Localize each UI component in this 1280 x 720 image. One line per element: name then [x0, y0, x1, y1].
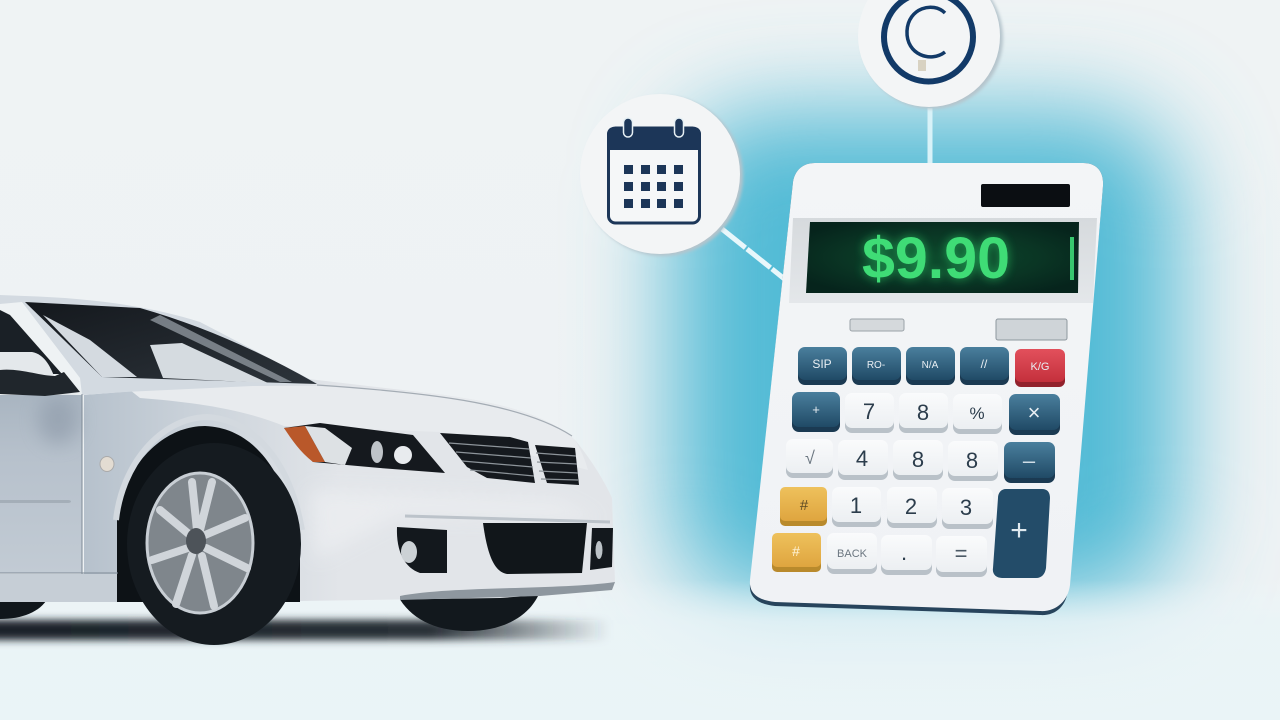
right slider: [996, 319, 1067, 340]
centre air intake: [483, 523, 587, 574]
bumper highlight: [310, 490, 600, 560]
key row 3: 8: [912, 447, 924, 472]
left fog recess: [397, 527, 447, 573]
spokes: [152, 482, 247, 606]
key row 1: K/G: [1031, 361, 1049, 373]
left slider: [850, 319, 904, 331]
right grille: [535, 445, 579, 485]
display cursor: [1070, 237, 1074, 280]
car body: [84, 378, 615, 601]
door shadow under mirror: [38, 396, 78, 444]
solar panel: [981, 184, 1070, 207]
windscreen reflection right: [150, 343, 268, 383]
sill: [0, 574, 118, 602]
bumper lip: [400, 582, 615, 600]
roof and A-pillar: [0, 295, 317, 395]
car: [0, 295, 615, 645]
key row 4: 1: [850, 493, 862, 518]
key row 4: 3: [960, 495, 972, 520]
key row 1: SIP: [812, 357, 832, 371]
connector: calendar to calculator: [722, 229, 787, 281]
display bezel: [789, 218, 1097, 303]
connector: copyright to calculator: [928, 108, 932, 164]
badge disc: [861, 0, 1003, 109]
blue glow behind calculator: [672, 112, 1177, 602]
left fog lamp: [401, 541, 417, 563]
key row 3: 4: [856, 446, 868, 471]
rim: [147, 473, 253, 613]
windscreen reflection top: [150, 315, 292, 382]
bumper upper crease: [405, 516, 610, 522]
plus key: +: [1010, 514, 1028, 547]
door panel: [0, 395, 82, 573]
key row 2: ×: [1028, 400, 1040, 425]
plus key: [993, 489, 1050, 578]
calendar badge: [580, 94, 743, 256]
wing mirror: [0, 352, 54, 376]
car ground shadow: [0, 620, 610, 640]
arch trim: [116, 417, 302, 530]
key row 5: .: [901, 540, 907, 565]
display value: $9.90: [862, 226, 1010, 291]
far front tyre: [398, 596, 538, 631]
hood crease: [317, 385, 572, 436]
key row 3: –: [1023, 448, 1036, 473]
key row 3: [786, 439, 1055, 483]
icon smudge: [918, 60, 926, 71]
calculator: [750, 163, 1103, 615]
key row 2: 8: [917, 400, 929, 425]
side window: [0, 310, 62, 374]
display screen: [806, 222, 1079, 293]
key row 5: =: [955, 541, 967, 566]
icon: copyright ring: [884, 0, 973, 82]
display glow: $9.90: [862, 226, 1010, 291]
tyre: [127, 443, 301, 645]
windscreen: [25, 302, 317, 384]
windscreen reflection left: [43, 315, 137, 377]
left grille: [440, 433, 535, 483]
wheel arch: [117, 426, 300, 602]
key row 4: #: [800, 497, 809, 514]
calculator case: [750, 163, 1103, 611]
front wheel: [127, 443, 301, 645]
copyright badge: [858, 0, 1003, 109]
key row 2: [792, 392, 1060, 435]
badge disc: [583, 96, 743, 256]
key row 1: [798, 347, 1065, 387]
floor highlight: [0, 580, 1280, 720]
key row 4: 2: [905, 494, 917, 519]
hub: [186, 528, 206, 554]
key row 3: 8: [966, 448, 978, 473]
key row 2: %: [969, 404, 985, 423]
key row 1: //: [981, 357, 988, 371]
key row 2: 7: [863, 399, 875, 424]
key row 1: N/A: [922, 360, 939, 371]
icon: copyright letter: [907, 7, 945, 57]
key row 4: [780, 487, 993, 529]
fender badge: [100, 456, 114, 472]
key row 2: +: [812, 402, 820, 417]
hood: [125, 386, 588, 470]
key row 5: #: [792, 543, 800, 559]
key row 1: RO-: [867, 360, 885, 371]
right fog lamp: [596, 541, 602, 559]
right fog recess: [590, 528, 613, 570]
wing mirror base: [0, 370, 80, 396]
rear tyre: [0, 598, 48, 619]
key row 5: BACK: [837, 548, 868, 560]
calculator edge shadow: [750, 163, 1103, 615]
headlight: [284, 423, 445, 473]
key row 5: [772, 533, 987, 577]
door line: [0, 500, 71, 503]
icon: calendar: [607, 118, 701, 223]
key row 3: √: [805, 448, 815, 468]
